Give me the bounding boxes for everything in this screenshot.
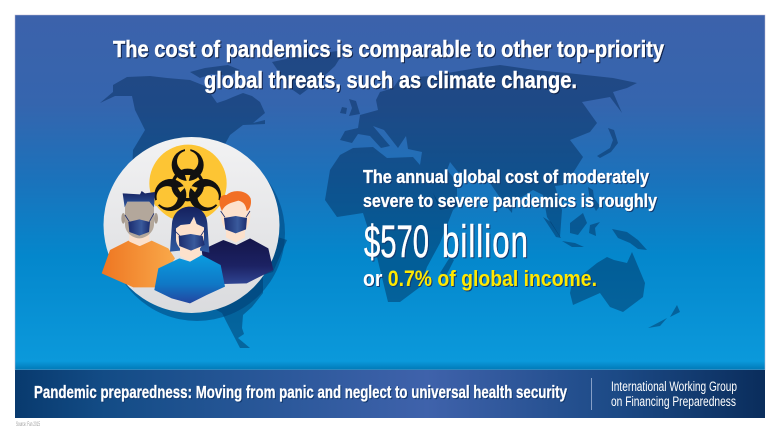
cost description: The annual global cost of moderately — [363, 167, 649, 187]
big number: $570 — [364, 216, 429, 267]
footer title: Pandemic preparedness: Moving from panic and neglect to universal health security — [34, 382, 567, 402]
arctic islands — [190, 65, 240, 78]
title — [113, 36, 664, 93]
philippines — [588, 187, 600, 211]
organisation name: on Financing Preparedness — [611, 394, 736, 409]
organisation name — [611, 379, 737, 409]
share of income: or 0.7% of global income. — [363, 266, 597, 291]
sulawesi — [589, 222, 600, 236]
icon: biohazard — [148, 145, 227, 222]
circle shadow — [109, 145, 285, 321]
white circle — [104, 137, 280, 313]
title: The cost of pandemics is comparable to other top-priority — [113, 36, 664, 62]
illustration: masked people in circle — [102, 137, 285, 321]
footer band — [15, 370, 765, 418]
new guinea — [612, 229, 647, 250]
cost description — [363, 167, 657, 211]
japan — [597, 128, 618, 158]
person: red-haired man — [202, 191, 273, 284]
eurasia — [340, 65, 637, 237]
new zealand — [648, 305, 680, 328]
madagascar — [440, 257, 454, 276]
sumatra and java — [543, 217, 584, 247]
greenland — [272, 50, 345, 95]
borneo — [570, 213, 587, 235]
person: woman in blue — [154, 207, 225, 303]
uk and ireland — [340, 99, 360, 116]
cost description: severe to severe pandemics is roughly — [363, 191, 657, 211]
big number: billion — [442, 216, 529, 267]
world map — [100, 50, 680, 348]
africa — [325, 147, 460, 302]
australia — [570, 252, 645, 312]
source note: Source: Fan 2015 — [16, 422, 40, 428]
background panel — [15, 15, 765, 370]
person: man in orange — [102, 191, 175, 287]
north america — [100, 76, 287, 348]
big number — [364, 216, 529, 267]
title: global threats, such as climate change. — [204, 67, 577, 93]
organisation name: International Working Group — [611, 379, 737, 394]
